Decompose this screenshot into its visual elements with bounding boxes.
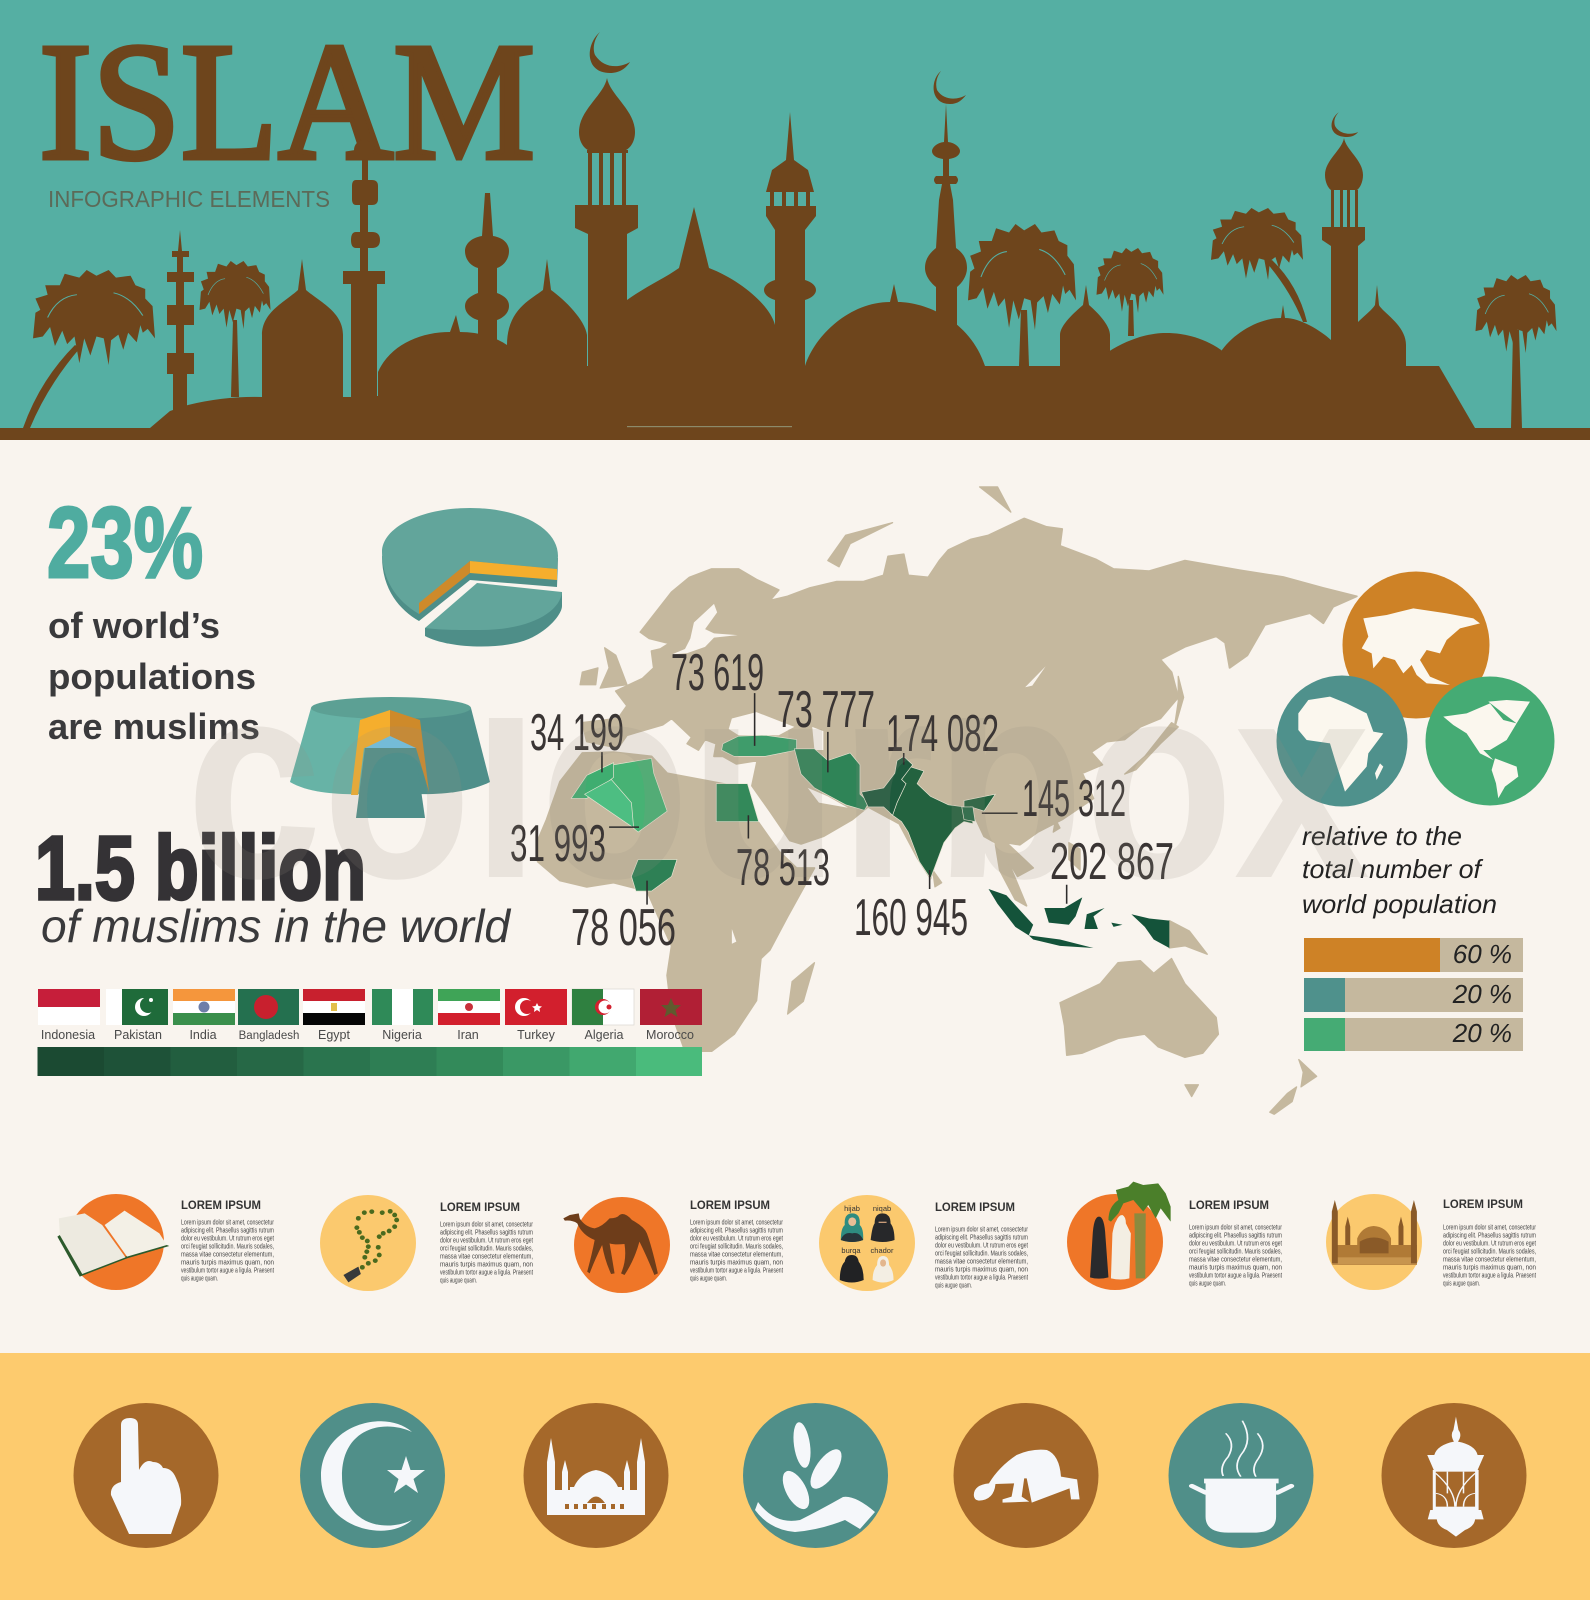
icon: veil types — [819, 1195, 915, 1291]
landmass: Eurasia — [582, 518, 1357, 906]
map population numbers: 31 993 — [510, 815, 606, 873]
pie chart — [382, 508, 562, 647]
bar: 20% green: 20 % — [1452, 1018, 1512, 1048]
legend gradient bar — [38, 1047, 702, 1076]
bar chart: regional share — [1304, 938, 1523, 1051]
flag labels — [41, 1028, 694, 1042]
body text: vestibulum tortor augue a ligula. Praesent — [181, 1266, 275, 1274]
left tower — [167, 230, 194, 410]
body text: dolor eu vestibulum. Ut rutrum eros eget — [181, 1234, 275, 1242]
body text — [440, 1220, 534, 1284]
body text: quis augue quam. — [935, 1280, 972, 1290]
illustration: mosque skyline — [0, 32, 1590, 440]
crescent 1 — [590, 32, 630, 73]
body text: orci feugiat sollicitudin. Mauris sodales, — [181, 1242, 274, 1250]
flag: Indonesia — [38, 989, 100, 1025]
body text — [1189, 1222, 1283, 1288]
body text: quis augue quam. — [1443, 1278, 1480, 1288]
body text: mauris turpis maximus quam, non — [690, 1258, 783, 1266]
info item 4: veils — [819, 1195, 1029, 1291]
stat: 1.5 billion: 1.5 billion — [35, 819, 366, 919]
body text: massa vitae consectetur elementum, — [440, 1252, 533, 1260]
info item 5: couple and palm — [1067, 1182, 1283, 1290]
icon: open book — [57, 1194, 169, 1290]
flags row — [38, 989, 702, 1025]
flag labels: Indonesia — [41, 1028, 95, 1042]
flag: India — [173, 989, 235, 1025]
islands — [580, 487, 1317, 1114]
palm trees — [23, 345, 80, 428]
text: of world's populations are muslims: of world’s — [48, 605, 220, 646]
map population numbers: 78 513 — [736, 839, 830, 897]
body text: orci feugiat sollicitudin. Mauris sodales, — [1189, 1246, 1282, 1256]
flag labels: India — [189, 1028, 217, 1042]
panel: pillars band — [0, 1353, 1590, 1600]
subtitle: INFOGRAPHIC ELEMENTS — [48, 186, 330, 212]
info item 3: camel — [563, 1197, 784, 1293]
heading: LOREM IPSUM — [1443, 1197, 1523, 1211]
world map — [538, 487, 1357, 1114]
body text: Lorem ipsum dolor sit amet, consectetur — [690, 1218, 783, 1226]
country: Iran — [794, 749, 869, 810]
dome cluster right — [805, 284, 985, 366]
globe: Asia — [1342, 572, 1490, 718]
flag: Turkey — [505, 989, 567, 1025]
bar: 60% — [1304, 938, 1523, 972]
flag: Iran — [438, 989, 500, 1025]
map population numbers: 78 056 — [571, 899, 676, 957]
flag labels: Nigeria — [382, 1028, 422, 1042]
info item 1: book — [57, 1194, 275, 1290]
body text: vestibulum tortor augue a ligula. Praesent — [1189, 1270, 1283, 1280]
country: Nigeria — [631, 860, 677, 891]
body text — [181, 1218, 275, 1282]
stat: 23%: 23% — [47, 487, 203, 599]
text: relative to the total number of world population: total number of — [1302, 854, 1484, 884]
body text: orci feugiat sollicitudin. Mauris sodales, — [440, 1244, 533, 1252]
body text: mauris turpis maximus quam, non — [1189, 1262, 1282, 1272]
icon: steaming pot — [1168, 1403, 1314, 1548]
heading: LOREM IPSUM — [1189, 1198, 1269, 1212]
icon: prayer beads — [320, 1195, 416, 1291]
text: of world's populations are muslims: populations — [48, 656, 256, 697]
leader lines — [602, 693, 1067, 905]
icon: camel — [563, 1197, 670, 1293]
pagoda minaret — [766, 112, 814, 192]
body text: massa vitae consectetur elementum, — [935, 1256, 1028, 1266]
body text: dolor eu vestibulum. Ut rutrum eros eget — [1189, 1238, 1283, 1248]
body text — [1443, 1222, 1537, 1288]
body text: adipiscing elit. Phasellus sagittis rutrum — [440, 1228, 533, 1236]
flag: Nigeria — [372, 989, 433, 1025]
icon: veil types: chador — [871, 1246, 894, 1255]
body text: vestibulum tortor augue a ligula. Praesent — [935, 1272, 1029, 1282]
globe: Africa — [1276, 676, 1408, 806]
body text: quis augue quam. — [690, 1274, 727, 1282]
body text: quis augue quam. — [181, 1274, 218, 1282]
flag: Bangladesh — [238, 989, 299, 1025]
panel: main stats background — [0, 440, 1590, 1353]
bar: 60%: 60 % — [1453, 939, 1512, 969]
icon: lantern — [1382, 1403, 1526, 1548]
flag labels: Bangladesh — [239, 1030, 299, 1042]
icon: veil types: hijab — [844, 1204, 860, 1213]
body text — [690, 1218, 784, 1282]
landmass: Africa — [538, 752, 814, 1051]
country: India — [893, 767, 995, 878]
bar: 20% teal — [1304, 978, 1523, 1012]
body text: adipiscing elit. Phasellus sagittis rutrum — [1189, 1230, 1282, 1240]
heading: LOREM IPSUM — [935, 1200, 1015, 1214]
body text: vestibulum tortor augue a ligula. Praesent — [690, 1266, 784, 1274]
body text: Lorem ipsum dolor sit amet, consectetur — [1189, 1222, 1282, 1232]
body text: Lorem ipsum dolor sit amet, consectetur — [935, 1224, 1028, 1234]
body text: dolor eu vestibulum. Ut rutrum eros eget — [690, 1234, 784, 1242]
text: of world's populations are muslims: are muslims — [48, 706, 260, 747]
body text: quis augue quam. — [1189, 1278, 1226, 1288]
body text: dolor eu vestibulum. Ut rutrum eros eget — [440, 1236, 534, 1244]
icon: veil types: niqab — [873, 1204, 891, 1213]
flag: Pakistan — [106, 989, 168, 1025]
body text: massa vitae consectetur elementum, — [1189, 1254, 1282, 1264]
country: Bangladesh — [962, 807, 975, 822]
body text: massa vitae consectetur elementum, — [181, 1250, 274, 1258]
body text: mauris turpis maximus quam, non — [1443, 1262, 1536, 1272]
map population numbers: 160 945 — [854, 889, 968, 947]
double-ball minaret — [465, 193, 509, 345]
onion minaret 1 — [579, 78, 635, 150]
flag labels: Turkey — [517, 1028, 556, 1042]
icon: crescent and star — [300, 1403, 445, 1548]
body text: Lorem ipsum dolor sit amet, consectetur — [1443, 1222, 1536, 1232]
flag: Morocco — [640, 989, 702, 1025]
body text: adipiscing elit. Phasellus sagittis rutrum — [690, 1226, 783, 1234]
icon: mosque silhouette — [524, 1403, 668, 1548]
body text: Lorem ipsum dolor sit amet, consectetur — [440, 1220, 533, 1228]
heading: LOREM IPSUM — [690, 1198, 770, 1212]
watermark: colourbox — [186, 625, 1372, 937]
icon: hand with coins — [743, 1403, 888, 1548]
body text: mauris turpis maximus quam, non — [181, 1258, 274, 1266]
country: Indonesia — [989, 889, 1169, 948]
body text: quis augue quam. — [440, 1276, 477, 1284]
text: of muslims in the world: of muslims in the world — [41, 900, 511, 952]
body text: orci feugiat sollicitudin. Mauris sodales, — [935, 1248, 1028, 1258]
globe: Americas — [1426, 676, 1554, 806]
flag labels: Pakistan — [114, 1028, 162, 1042]
country: Pakistan — [861, 756, 913, 815]
icon: prostrating figure — [954, 1403, 1098, 1548]
flag labels: Morocco — [646, 1028, 694, 1042]
minaret with balcony — [343, 150, 385, 397]
flag labels: Algeria — [585, 1028, 623, 1042]
globes — [1276, 572, 1554, 806]
highlighted countries — [571, 735, 995, 891]
heading: LOREM IPSUM — [440, 1200, 520, 1214]
country: Egypt — [716, 784, 759, 822]
country: Mauritania-Mali region — [585, 780, 634, 828]
icon: veil types: burqa — [841, 1246, 861, 1255]
body text: orci feugiat sollicitudin. Mauris sodales, — [1443, 1246, 1536, 1256]
icon: Kaaba hat — [290, 697, 490, 818]
country: Algeria — [585, 758, 667, 832]
map population numbers: 34 199 — [530, 704, 624, 762]
panel: header banner — [0, 0, 1590, 440]
map population numbers: 73 619 — [671, 644, 764, 702]
info item 2: prayer beads — [320, 1195, 534, 1291]
text: relative to the total number of world population: world population — [1302, 889, 1497, 919]
map population numbers: 73 777 — [777, 681, 875, 739]
body text: Lorem ipsum dolor sit amet, consectetur — [181, 1218, 274, 1226]
map population numbers — [510, 644, 1174, 957]
body text: adipiscing elit. Phasellus sagittis rutrum — [935, 1232, 1028, 1242]
flag labels: Iran — [457, 1028, 479, 1042]
info item 6: mosque — [1326, 1194, 1537, 1290]
body text: massa vitae consectetur elementum, — [690, 1250, 783, 1258]
body text: adipiscing elit. Phasellus sagittis rutrum — [1443, 1230, 1536, 1240]
heading: LOREM IPSUM — [181, 1198, 261, 1212]
tall spire minaret — [925, 104, 967, 345]
bar: 20% teal: 20 % — [1452, 979, 1512, 1009]
bar: 20% green — [1304, 1018, 1523, 1051]
body text: vestibulum tortor augue a ligula. Praesent — [1443, 1270, 1537, 1280]
map population numbers: 174 082 — [886, 705, 999, 763]
map population numbers: 145 312 — [1022, 770, 1126, 828]
map population numbers: 202 867 — [1050, 833, 1174, 891]
text: of world's populations are muslims — [48, 605, 260, 747]
body text: vestibulum tortor augue a ligula. Praesent — [440, 1268, 534, 1276]
country: Turkey — [722, 735, 797, 756]
body text: mauris turpis maximus quam, non — [935, 1264, 1028, 1274]
body text — [935, 1224, 1029, 1290]
text: relative to the total number of world population — [1302, 821, 1497, 919]
country: Morocco — [571, 763, 614, 798]
body text: adipiscing elit. Phasellus sagittis rutrum — [181, 1226, 274, 1234]
inland seas — [672, 604, 1046, 944]
onion minaret 2 — [1325, 138, 1363, 190]
body text: orci feugiat sollicitudin. Mauris sodales, — [690, 1242, 783, 1250]
icon: mosque — [1326, 1194, 1422, 1290]
body text: massa vitae consectetur elementum, — [1443, 1254, 1536, 1264]
icon: raised finger (shahada) — [74, 1403, 218, 1548]
flag labels: Egypt — [318, 1028, 351, 1042]
flag: Algeria — [572, 989, 634, 1025]
text: relative to the total number of world population: relative to the — [1302, 821, 1462, 851]
flag: Egypt — [303, 989, 365, 1025]
body text: dolor eu vestibulum. Ut rutrum eros eget — [935, 1240, 1029, 1250]
title: ISLAM — [39, 9, 535, 195]
icon: couple under palm — [1067, 1182, 1171, 1290]
body text: dolor eu vestibulum. Ut rutrum eros eget — [1443, 1238, 1537, 1248]
body text: mauris turpis maximus quam, non — [440, 1260, 533, 1268]
